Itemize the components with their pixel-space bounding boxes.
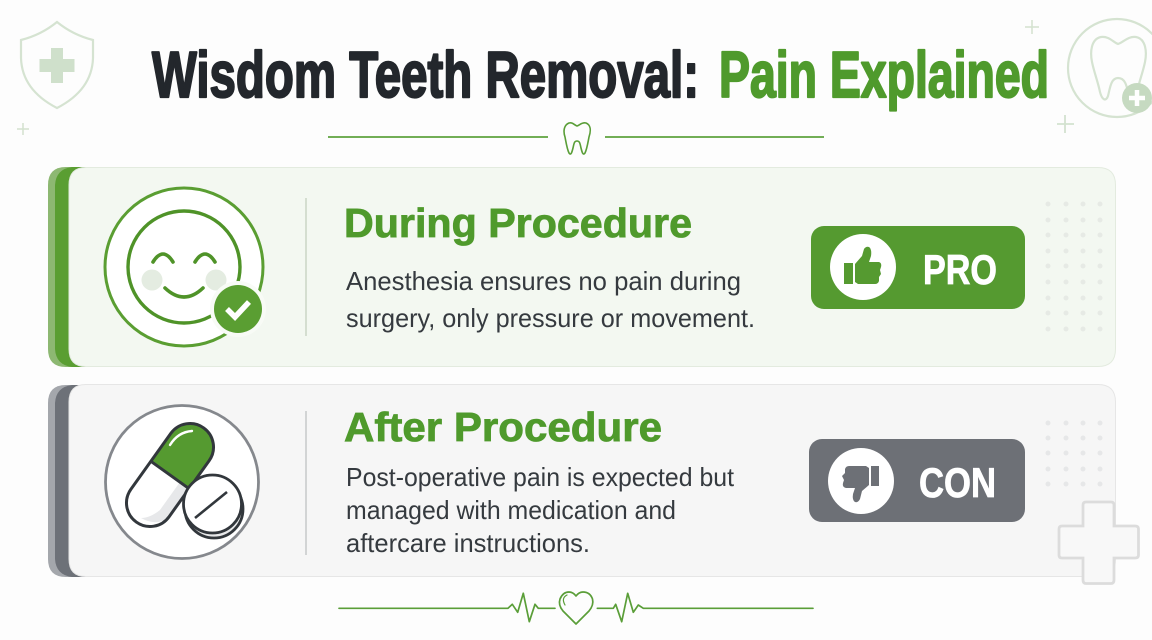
card background xyxy=(69,168,1116,366)
panel: during procedure xyxy=(48,167,1116,367)
accent bar xyxy=(48,167,90,367)
icon: smiley with check xyxy=(105,188,266,346)
body text: Post-operative pain is expected but xyxy=(346,462,735,492)
con badge: CON xyxy=(919,459,996,506)
header divider with tooth xyxy=(328,123,824,154)
divider xyxy=(305,198,307,336)
body text xyxy=(346,266,755,333)
pro badge: PRO xyxy=(923,246,997,293)
heading: During Procedure xyxy=(344,200,692,246)
icon: small plus top right xyxy=(1025,20,1039,34)
icon: small plus left xyxy=(17,123,29,135)
icon: thumbs down xyxy=(842,466,879,502)
footer heartbeat divider xyxy=(339,592,813,624)
card background xyxy=(69,384,1116,576)
dot pattern xyxy=(1046,420,1102,486)
body text xyxy=(346,462,735,558)
body text: Anesthesia ensures no pain during xyxy=(346,266,741,296)
divider xyxy=(305,411,307,555)
icon: small plus right xyxy=(1057,115,1074,133)
accent bar xyxy=(48,385,90,577)
body text: aftercare instructions. xyxy=(346,528,590,558)
con badge xyxy=(809,439,1025,522)
pro badge xyxy=(811,226,1025,309)
icon: pills xyxy=(106,406,258,558)
title: Wisdom Teeth Removal: xyxy=(152,38,699,111)
body text: managed with medication and xyxy=(346,495,676,525)
heading: After Procedure xyxy=(344,404,662,450)
body text: surgery, only pressure or movement. xyxy=(346,303,755,333)
icon: large outlined cross xyxy=(1059,502,1138,584)
icon: tooth in circle with plus badge xyxy=(1068,19,1152,117)
icon: thumbs up xyxy=(844,247,881,284)
panel: after procedure xyxy=(48,384,1116,577)
dot pattern xyxy=(1046,202,1102,332)
icon: shield with cross xyxy=(21,22,93,108)
